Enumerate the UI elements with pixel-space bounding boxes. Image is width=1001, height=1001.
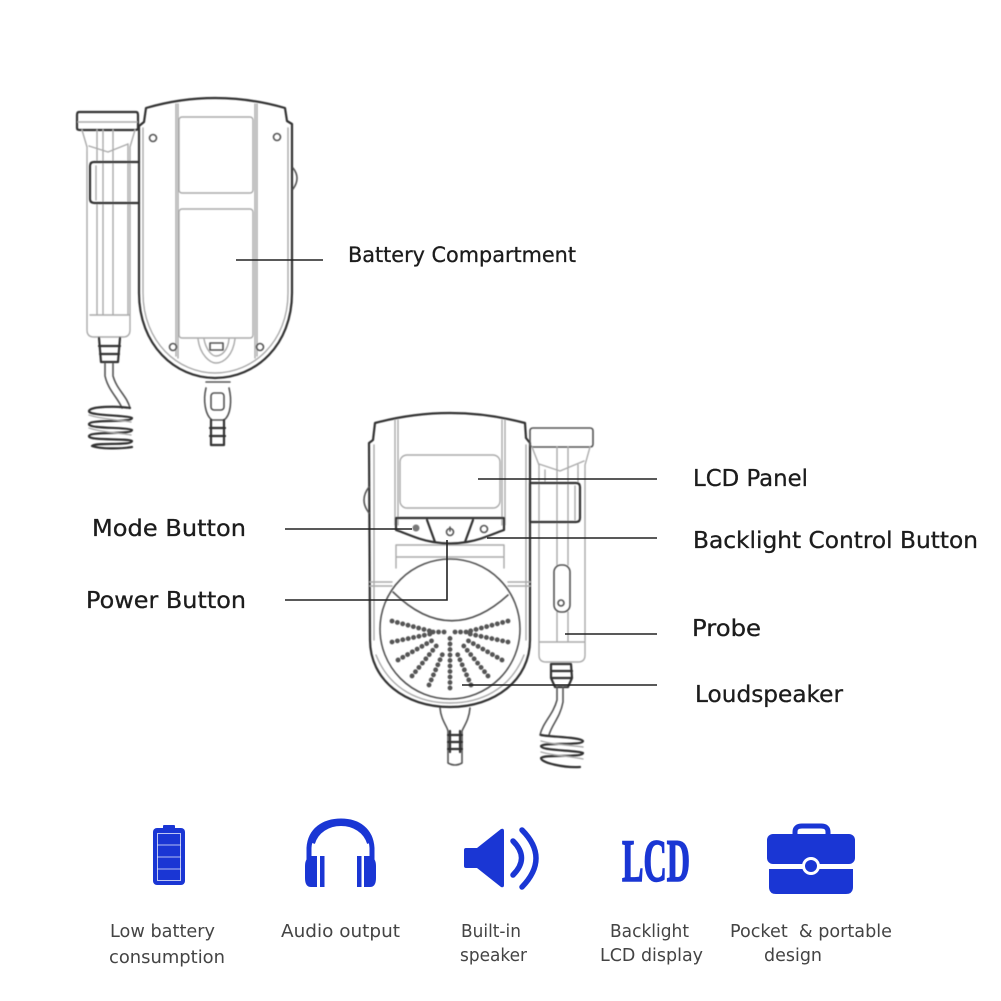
caption: backlight LCD display: Backlight (610, 922, 689, 942)
icon: LCD: LCD (622, 828, 690, 894)
caption: low battery consumption: Low battery (110, 922, 215, 942)
caption: low battery consumption: consumption (109, 948, 225, 968)
caption: backlight LCD display (600, 922, 703, 966)
diagram: device back view (77, 98, 297, 448)
caption: low battery consumption (109, 922, 225, 968)
icon: battery (153, 825, 185, 885)
caption: pocket and portable design: Pocket & portable (730, 922, 892, 942)
icon: speaker (464, 829, 536, 887)
leader: probe (565, 633, 657, 635)
back device lower connector (205, 382, 231, 445)
LCD panel outline (400, 455, 500, 508)
label: backlight control button: Backlight Control Button (693, 528, 978, 554)
back view probe (77, 112, 139, 448)
caption: audio output: Audio output (281, 922, 400, 942)
icon: briefcase (767, 826, 855, 894)
label: loudspeaker: Loudspeaker (695, 682, 844, 708)
loudspeaker grille (376, 559, 524, 703)
leader: battery compartment (236, 259, 323, 261)
caption: built-in speaker: Built-in (461, 922, 521, 942)
caption: pocket and portable design (730, 922, 892, 966)
leader: loudspeaker (462, 684, 657, 686)
leader: power button (285, 540, 447, 600)
caption: built-in speaker (460, 922, 528, 966)
leader: backlight control button (487, 537, 657, 539)
front device lower connector (440, 708, 470, 765)
label: probe: Probe (692, 616, 761, 642)
front view probe (530, 428, 593, 767)
label: LCD panel: LCD Panel (693, 466, 808, 492)
label: battery compartment: Battery Compartment (348, 243, 576, 268)
back device casing (139, 98, 297, 378)
front device casing (364, 413, 530, 707)
diagram: device front view (364, 413, 593, 767)
caption: pocket and portable design: design (764, 946, 822, 966)
leader: LCD panel (478, 478, 657, 480)
leader: mode button (285, 528, 412, 530)
label: power button: Power Button (86, 588, 246, 614)
caption: backlight LCD display: LCD display (600, 946, 703, 966)
front button panel (396, 518, 504, 544)
icon: headphones (305, 821, 376, 887)
caption: built-in speaker: speaker (460, 946, 528, 966)
label: mode button: Mode Button (92, 516, 246, 542)
